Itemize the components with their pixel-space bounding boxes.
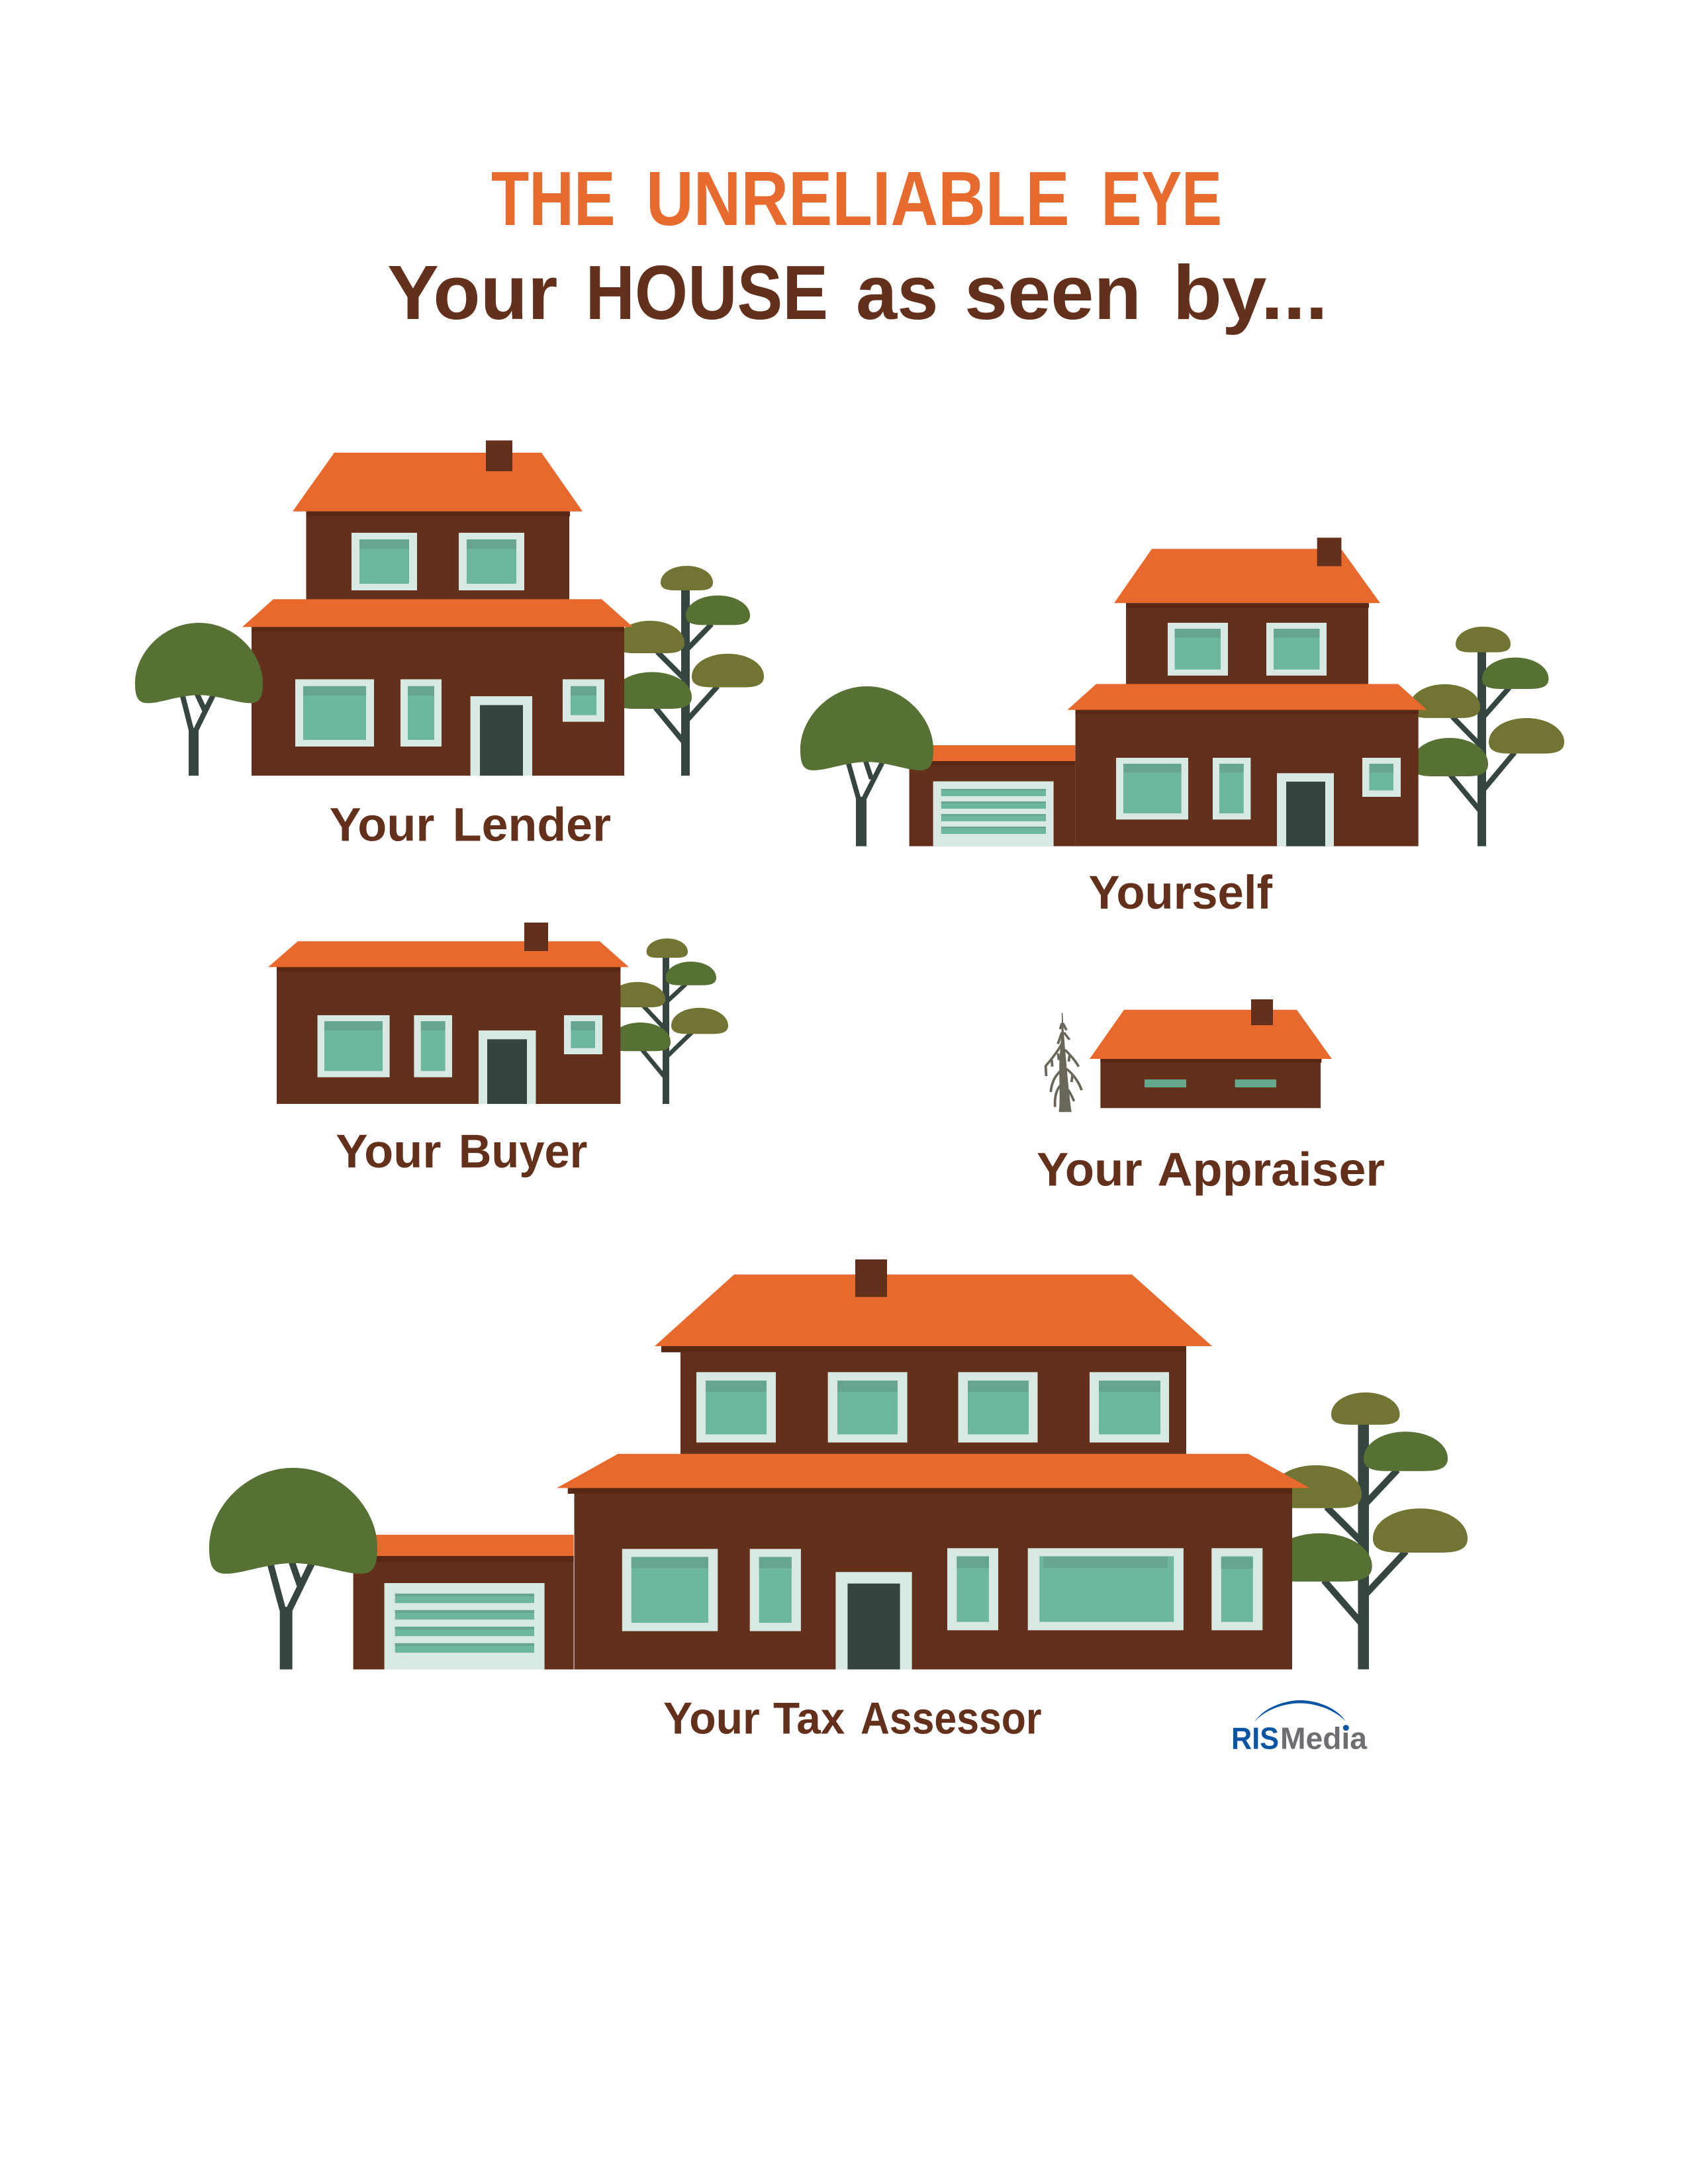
subheading: your house as seen by: seen [964, 250, 1141, 336]
logo text: Media [1280, 1721, 1367, 1755]
logo arc [1254, 1700, 1346, 1722]
logo text: RIS [1231, 1721, 1279, 1755]
label: your buyer: Your [336, 1126, 441, 1178]
window: narrow right [1211, 1548, 1262, 1630]
roof: upper [655, 1275, 1212, 1346]
house: lender [242, 441, 633, 776]
roof: upper [1114, 549, 1380, 603]
window: narrow [400, 679, 442, 747]
window: big left [622, 1549, 718, 1631]
logo: RISMedia [1231, 1700, 1367, 1755]
wall: lower [252, 627, 624, 776]
window: upper right [459, 533, 524, 590]
window: big [295, 679, 374, 747]
house: yourself [910, 537, 1427, 846]
window: upper 3 [959, 1372, 1038, 1443]
label: your tax assessor: Tax [773, 1694, 845, 1744]
panel: your lender [135, 441, 764, 851]
chimney [1251, 999, 1273, 1025]
wall: lower [575, 1488, 1292, 1669]
window: small [1362, 758, 1401, 797]
tree: right tree [1268, 1392, 1468, 1669]
tree: dead tree [1046, 1013, 1082, 1112]
panel: your appraiser [1037, 999, 1385, 1197]
window: upper 4 [1090, 1372, 1169, 1443]
window: small [564, 1015, 602, 1054]
window: small [563, 679, 604, 722]
window: upper left [1168, 623, 1228, 676]
wall [1100, 1059, 1321, 1108]
window: wide right [1028, 1548, 1184, 1630]
roof [1090, 1010, 1332, 1059]
wall: upper [680, 1346, 1186, 1454]
roof [268, 941, 629, 967]
label: your buyer: Buyer [459, 1126, 587, 1178]
label: your lender: Lender [453, 799, 611, 851]
roof: lower [1067, 684, 1427, 710]
wall: upper [1126, 603, 1368, 684]
tree: right tree [1409, 627, 1564, 846]
label: your appraiser: Your [1037, 1144, 1143, 1197]
door [471, 696, 532, 776]
panel: yourself [800, 537, 1564, 919]
window: narrow centre [947, 1548, 998, 1630]
roof: upper [293, 453, 583, 512]
tree: right tree [610, 938, 728, 1104]
window: upper right [1266, 623, 1327, 676]
door [479, 1030, 536, 1104]
window: narrow [1213, 758, 1250, 819]
house: appraiser [1090, 999, 1332, 1108]
window: right slit [1235, 1079, 1276, 1087]
label: your appraiser: Appraiser [1157, 1144, 1385, 1197]
roof: lower [557, 1454, 1310, 1488]
panel: your tax assessor [209, 1259, 1468, 1744]
logo i dot [1343, 1725, 1349, 1731]
heading: the unreliable eye: UNRELIABLE [646, 156, 1070, 242]
panel: your buyer [268, 923, 728, 1178]
heading: the unreliable eye: EYE [1102, 156, 1222, 242]
label: your tax assessor: Assessor [861, 1694, 1042, 1744]
window: narrow [414, 1015, 452, 1077]
window: big [318, 1015, 390, 1077]
chimney [524, 923, 548, 951]
window: upper 1 [696, 1372, 776, 1443]
door [1277, 773, 1334, 846]
subheading: your house as seen by: by... [1173, 250, 1328, 336]
title [387, 156, 1328, 336]
tree: right tree [612, 566, 764, 776]
window: narrow left [750, 1549, 801, 1631]
wall: upper [306, 512, 569, 600]
window: upper left [352, 533, 417, 590]
house: buyer [268, 923, 629, 1104]
window: left slit [1145, 1079, 1186, 1087]
subheading: your house as seen by: as [856, 250, 939, 336]
tree: left tree [800, 686, 933, 846]
label: your lender: Your [330, 799, 434, 851]
chimney [855, 1259, 887, 1297]
wall [277, 967, 620, 1104]
window: big [1116, 758, 1188, 819]
chimney [486, 441, 512, 471]
tree: left tree [135, 623, 263, 776]
chimney [1317, 537, 1341, 567]
window: upper 2 [828, 1372, 908, 1443]
tree: left tree [209, 1468, 377, 1669]
roof: lower [242, 599, 633, 627]
door [835, 1572, 912, 1669]
subheading: your house as seen by: HOUSE [585, 250, 828, 336]
heading: the unreliable eye: THE [491, 156, 616, 242]
label: yourself: Yourself [1088, 867, 1272, 919]
garage [910, 745, 1076, 846]
house: tax assessor [353, 1259, 1310, 1669]
wall: lower [1076, 709, 1419, 846]
subheading: your house as seen by: Your [387, 250, 557, 336]
garage [353, 1535, 574, 1669]
label: your tax assessor: Your [663, 1694, 760, 1744]
